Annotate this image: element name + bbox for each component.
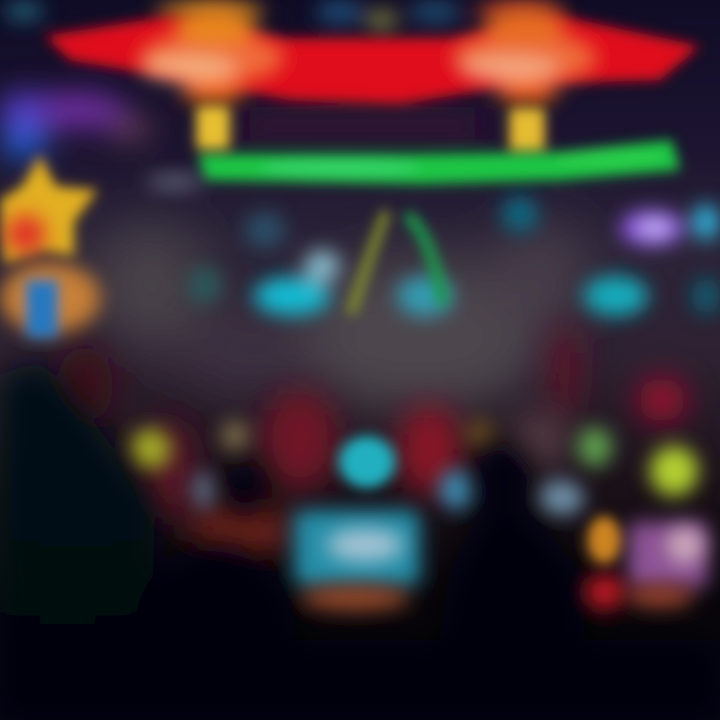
centre green and yellow streaks <box>352 215 442 310</box>
lower floor <box>0 640 720 720</box>
red crowd lights <box>57 324 686 560</box>
panel highlight <box>667 527 703 563</box>
pale strip beside green bar <box>147 173 203 191</box>
centre right figure <box>475 444 531 512</box>
left figure <box>0 360 155 680</box>
centre left figure <box>223 464 267 516</box>
left lantern glow <box>140 8 284 102</box>
star <box>0 155 98 264</box>
violet light <box>620 210 684 246</box>
left cyan screen <box>254 277 330 315</box>
grey crowd haze <box>90 220 590 410</box>
yellow columns <box>196 106 545 152</box>
yellow star sign <box>0 155 100 338</box>
small blue crowd lights <box>193 470 584 516</box>
dark silhouettes <box>0 360 720 720</box>
cyan and violet screens <box>189 196 720 316</box>
red banner <box>45 16 700 104</box>
cyan orb <box>339 436 395 488</box>
star centre <box>6 214 46 254</box>
dark band under banner <box>240 116 485 136</box>
top ceiling lights <box>4 0 565 32</box>
far right cyan light <box>692 204 720 240</box>
right stage panel <box>585 516 708 610</box>
blue base panel <box>26 280 58 338</box>
left purple and blue lights <box>0 92 152 158</box>
star base <box>0 262 100 334</box>
red lamp <box>585 574 625 610</box>
monitor highlight <box>327 529 403 561</box>
orange lamp <box>587 516 621 564</box>
magenta panel <box>628 522 708 588</box>
centre cyan screen <box>397 276 453 316</box>
upper teal lights <box>502 196 538 232</box>
monitor glow <box>294 510 420 586</box>
orange panel base <box>626 584 694 608</box>
yellow green crowd lights <box>130 420 698 496</box>
central monitor <box>294 510 420 611</box>
monitor base <box>300 585 410 611</box>
right lantern glow <box>453 8 597 102</box>
right cyan screen <box>584 276 648 316</box>
green bar <box>198 140 680 184</box>
